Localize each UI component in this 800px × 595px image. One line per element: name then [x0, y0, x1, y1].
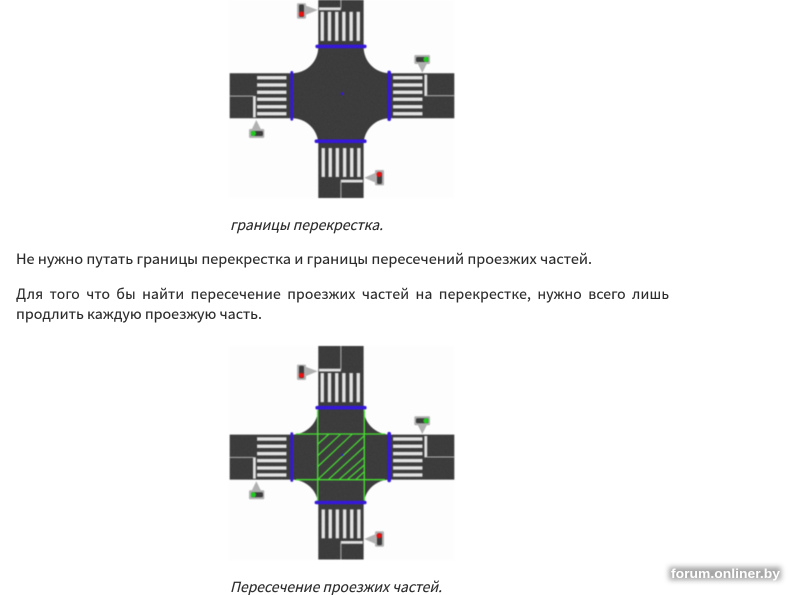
traffic light: left green	[249, 120, 264, 138]
traffic light: bottom red	[364, 170, 384, 185]
stop lines and lane dividers	[230, 0, 454, 198]
paragraph: how to find the crossing: продлить каждую проезжую часть.	[16, 304, 262, 324]
crosswalk: bottom	[322, 510, 360, 538]
crosswalk: left	[257, 76, 286, 115]
crosswalk: right	[393, 438, 422, 476]
traffic light: right green	[414, 55, 430, 73]
crosswalk: left	[257, 438, 286, 476]
crosswalk: bottom	[322, 148, 360, 177]
paragraph: how to find the crossing	[16, 284, 669, 324]
crosswalk: top	[321, 12, 360, 41]
blue boundary lines	[292, 46, 389, 141]
traffic light: bottom red	[364, 531, 384, 547]
road surface	[230, 0, 454, 198]
traffic light: top red	[297, 3, 318, 19]
watermark: forum.onliner.by	[671, 567, 780, 581]
traffic light: right green	[414, 416, 430, 434]
center point	[341, 454, 343, 456]
road surface	[230, 346, 454, 560]
stop lines and lane dividers	[230, 346, 454, 560]
caption: intersection boundaries: границы перекрестка.	[230, 215, 383, 235]
traffic light: left green	[249, 481, 264, 499]
paragraph: do not confuse boundaries: Не нужно путать границы перекрестка и границы пересечений проезжих частей.	[16, 249, 592, 269]
green hatching	[318, 434, 364, 480]
diagram: carriageway crossing	[229, 346, 454, 560]
blue boundary lines	[292, 408, 389, 502]
paragraph: how to find the crossing: Для того что бы найти пересечение проезжих частей на перекрестке, нужно всего лишь	[16, 284, 669, 304]
traffic light: top red	[297, 365, 318, 380]
diagram: intersection boundaries	[229, 0, 454, 198]
crosswalk: right	[393, 76, 422, 115]
green crossing outline	[296, 410, 385, 503]
center point	[341, 92, 344, 95]
crosswalk: top	[321, 373, 360, 402]
